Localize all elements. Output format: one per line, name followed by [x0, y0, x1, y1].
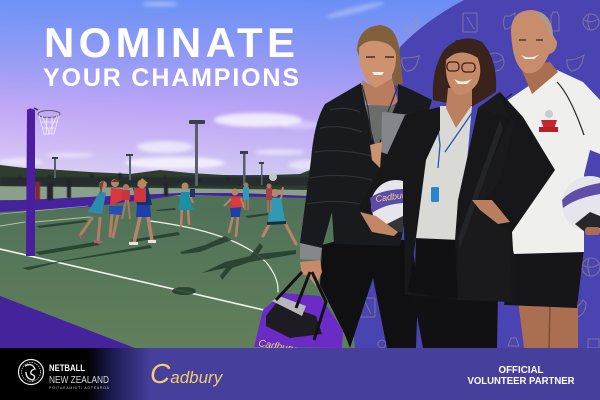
sky background [0, 0, 480, 175]
icon pattern [360, 12, 600, 348]
far purple runoff [0, 193, 308, 212]
netball new zealand logo: NETBALL [49, 363, 85, 373]
netball under arm: Cadbury [375, 189, 410, 204]
court lines [0, 206, 278, 310]
person: man in white polo [500, 10, 600, 348]
distant player [122, 184, 130, 219]
head [511, 10, 557, 73]
head and hair [357, 25, 403, 86]
player with navy sleeves [129, 178, 156, 245]
netball new zealand logo: NEW ZEALAND [49, 375, 109, 386]
footer bar [0, 348, 600, 400]
person: woman in lanyard and black jacket [358, 38, 555, 348]
netball new zealand logo [18, 360, 110, 390]
player in teal, far left [78, 180, 107, 243]
netball court scene [0, 108, 355, 348]
shorts [504, 248, 584, 308]
official volunteer partner: OFFICIAL [498, 365, 544, 376]
official volunteer partner: VOLUNTEER PARTNER [468, 376, 575, 387]
duffel bag [254, 272, 343, 356]
duffel bag: Cadbury [257, 338, 298, 356]
netball under arm [370, 180, 403, 232]
folder [381, 112, 412, 160]
grey shirt [414, 106, 472, 240]
polo badge [539, 110, 558, 132]
goal post and ring [26, 108, 60, 256]
purple arc panel with icons [346, 0, 600, 348]
title [43, 19, 299, 92]
tree line [0, 165, 310, 190]
hand on hip [472, 200, 510, 224]
sleeve cuff [300, 243, 322, 260]
title: nominate: NOMINATE [44, 19, 295, 66]
cadbury logo: Cadbury [150, 358, 224, 389]
crowd [0, 173, 310, 200]
person: woman in black puffer jacket [300, 25, 432, 348]
floodlight poles [52, 120, 264, 186]
official volunteer partner [468, 365, 575, 387]
legs [518, 300, 578, 348]
court shadows [22, 208, 296, 295]
far ground [0, 186, 310, 200]
netball new zealand logo: POITARAMHITI AOTEAROA [49, 386, 110, 390]
player in teal, centre [178, 182, 196, 226]
players [78, 173, 296, 245]
hair back [433, 38, 496, 108]
right hand on folder [370, 142, 382, 168]
logo emblem [18, 360, 44, 384]
black jacket [358, 92, 555, 302]
jumping player in teal [263, 173, 296, 244]
whistle [431, 187, 439, 202]
subtitle: your champions: YOUR CHAMPIONS [43, 64, 299, 92]
leggings [320, 240, 418, 348]
near purple runoff [0, 296, 134, 348]
puffer jacket [300, 83, 432, 248]
far players [190, 182, 272, 212]
court surface [0, 196, 355, 348]
face [446, 52, 480, 95]
neck [446, 88, 472, 128]
player with red bib, arms out [224, 188, 244, 236]
polo shirt [500, 70, 600, 254]
player in red bib [109, 178, 123, 237]
supporting hand [360, 212, 398, 236]
grey top [366, 105, 395, 150]
left hand [300, 260, 322, 286]
neck [520, 62, 558, 94]
trousers [414, 236, 498, 348]
netball under arm [562, 176, 600, 232]
